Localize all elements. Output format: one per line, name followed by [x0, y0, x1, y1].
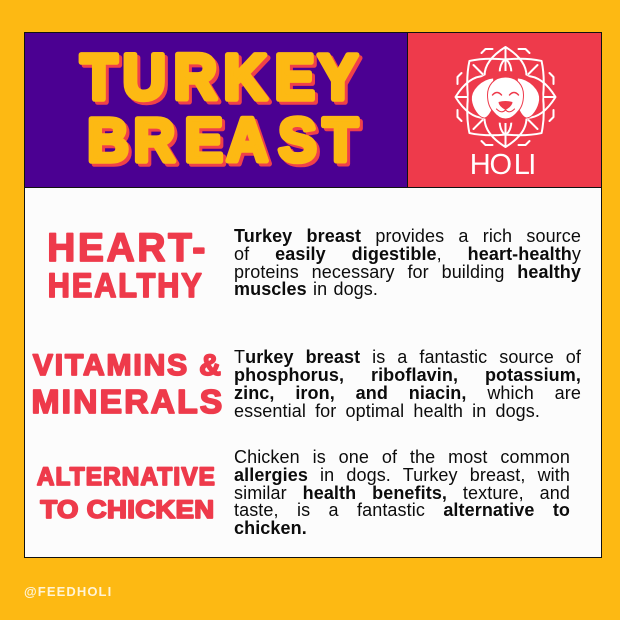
text block: heart-healthy description: proteins necessary for building healthy [234, 262, 581, 282]
icon: Holi dog mandala logo [454, 46, 556, 178]
heading: Heart-Healthy: HEALTHY [48, 267, 202, 304]
text block: heart-healthy description: muscles in dogs. [234, 279, 378, 299]
text block: vitamins and minerals description: phosphorus, riboflavin, potassium, [234, 365, 581, 385]
text block: alternative to chicken description: taste, is a fantastic alternative to [234, 500, 570, 520]
dog head [468, 71, 542, 123]
text block: vitamins and minerals description [234, 347, 581, 421]
heading: Alternative to Chicken [36, 464, 215, 524]
panel: main frame [24, 32, 602, 558]
heading: Heart-Healthy: HEART- [47, 225, 205, 270]
heading: Heart-Healthy [47, 225, 205, 304]
text block: vitamins and minerals description: Turkey breast is a fantastic source of [234, 347, 581, 367]
text block: alternative to chicken description: similar health benefits, texture, and [234, 483, 570, 503]
title: TURKEY [81, 43, 358, 114]
social handle: @FEEDHOLI [24, 584, 112, 599]
text block: heart-healthy description: of easily digestible, heart-healthy [234, 244, 581, 264]
text block: heart-healthy description: Turkey breast provides a rich source [234, 226, 581, 246]
text block: alternative to chicken description [234, 447, 570, 538]
text block: vitamins and minerals description: essential for optimal health in dogs. [234, 401, 540, 421]
heading: Alternative to Chicken: TO CHICKEN [40, 495, 214, 524]
title [78, 43, 363, 178]
heading: Alternative to Chicken: ALTERNATIVE [37, 464, 215, 491]
heading: Vitamins and Minerals [32, 349, 222, 420]
title: TURKEY [84, 46, 361, 117]
text block: alternative to chicken description: Chicken is one of the most common [234, 447, 570, 467]
heading: Vitamins and Minerals: MINERALS [32, 384, 222, 420]
heading: Vitamins and Minerals: VITAMINS & [33, 349, 221, 382]
panel: title background [25, 33, 407, 188]
text block: heart-healthy description [234, 226, 581, 299]
panel: logo background [407, 33, 601, 188]
text block: alternative to chicken description: allergies in dogs. Turkey breast, with [234, 465, 570, 485]
title: BREAST [87, 106, 358, 175]
text block: vitamins and minerals description: zinc, iron, and niacin, which are [234, 383, 581, 403]
title: BREAST [90, 109, 361, 178]
text block: alternative to chicken description: chicken. [234, 518, 307, 538]
